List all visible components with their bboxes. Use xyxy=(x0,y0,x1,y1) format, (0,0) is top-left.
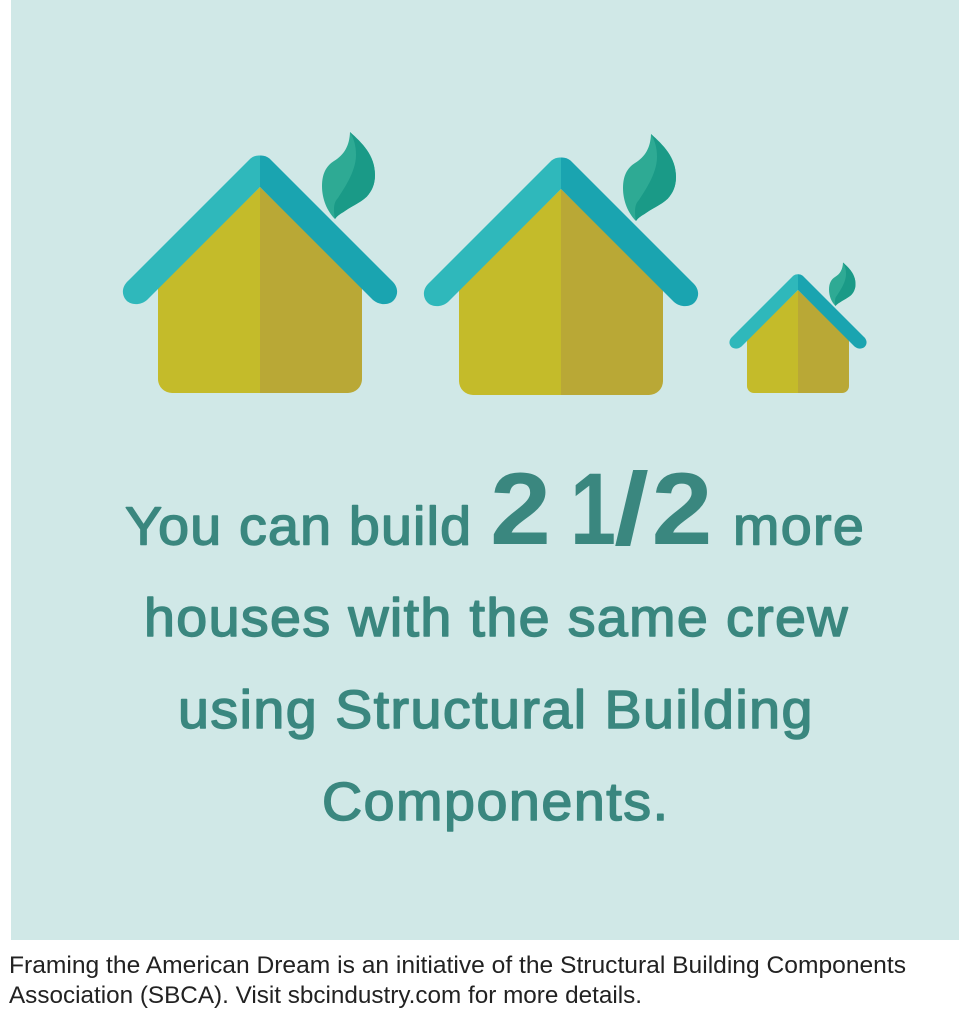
house body xyxy=(747,290,849,393)
footer note xyxy=(9,952,906,1009)
leaf xyxy=(829,262,856,306)
headline line 1: start: You can build xyxy=(125,495,471,556)
headline big number: 2 xyxy=(490,452,551,566)
headline line 2: houses with the same crew xyxy=(144,587,848,648)
headline big number xyxy=(490,452,712,566)
leaf xyxy=(623,134,676,221)
headline text xyxy=(125,452,864,832)
house body xyxy=(459,189,663,395)
headline line 4: Components. xyxy=(322,771,668,832)
icon: house small right xyxy=(729,262,867,393)
house roof xyxy=(729,274,867,349)
footer line 1: Framing the American Dream is an initiative of the Structural Building Components xyxy=(9,952,906,979)
house roof xyxy=(123,155,397,304)
headline line 3: using Structural Building xyxy=(178,679,812,740)
leaf xyxy=(322,132,375,219)
headline big number: / xyxy=(614,452,649,566)
headline line 1: end: more xyxy=(733,495,864,556)
house roof xyxy=(424,157,698,306)
headline big number: 1 xyxy=(570,452,616,566)
house body xyxy=(158,187,362,393)
footer line 2: Association (SBCA). Visit sbcindustry.com for more details. xyxy=(9,982,642,1009)
headline big number: 2 xyxy=(652,452,712,566)
icon: house large left xyxy=(123,132,397,393)
icon: house large middle xyxy=(424,134,698,395)
